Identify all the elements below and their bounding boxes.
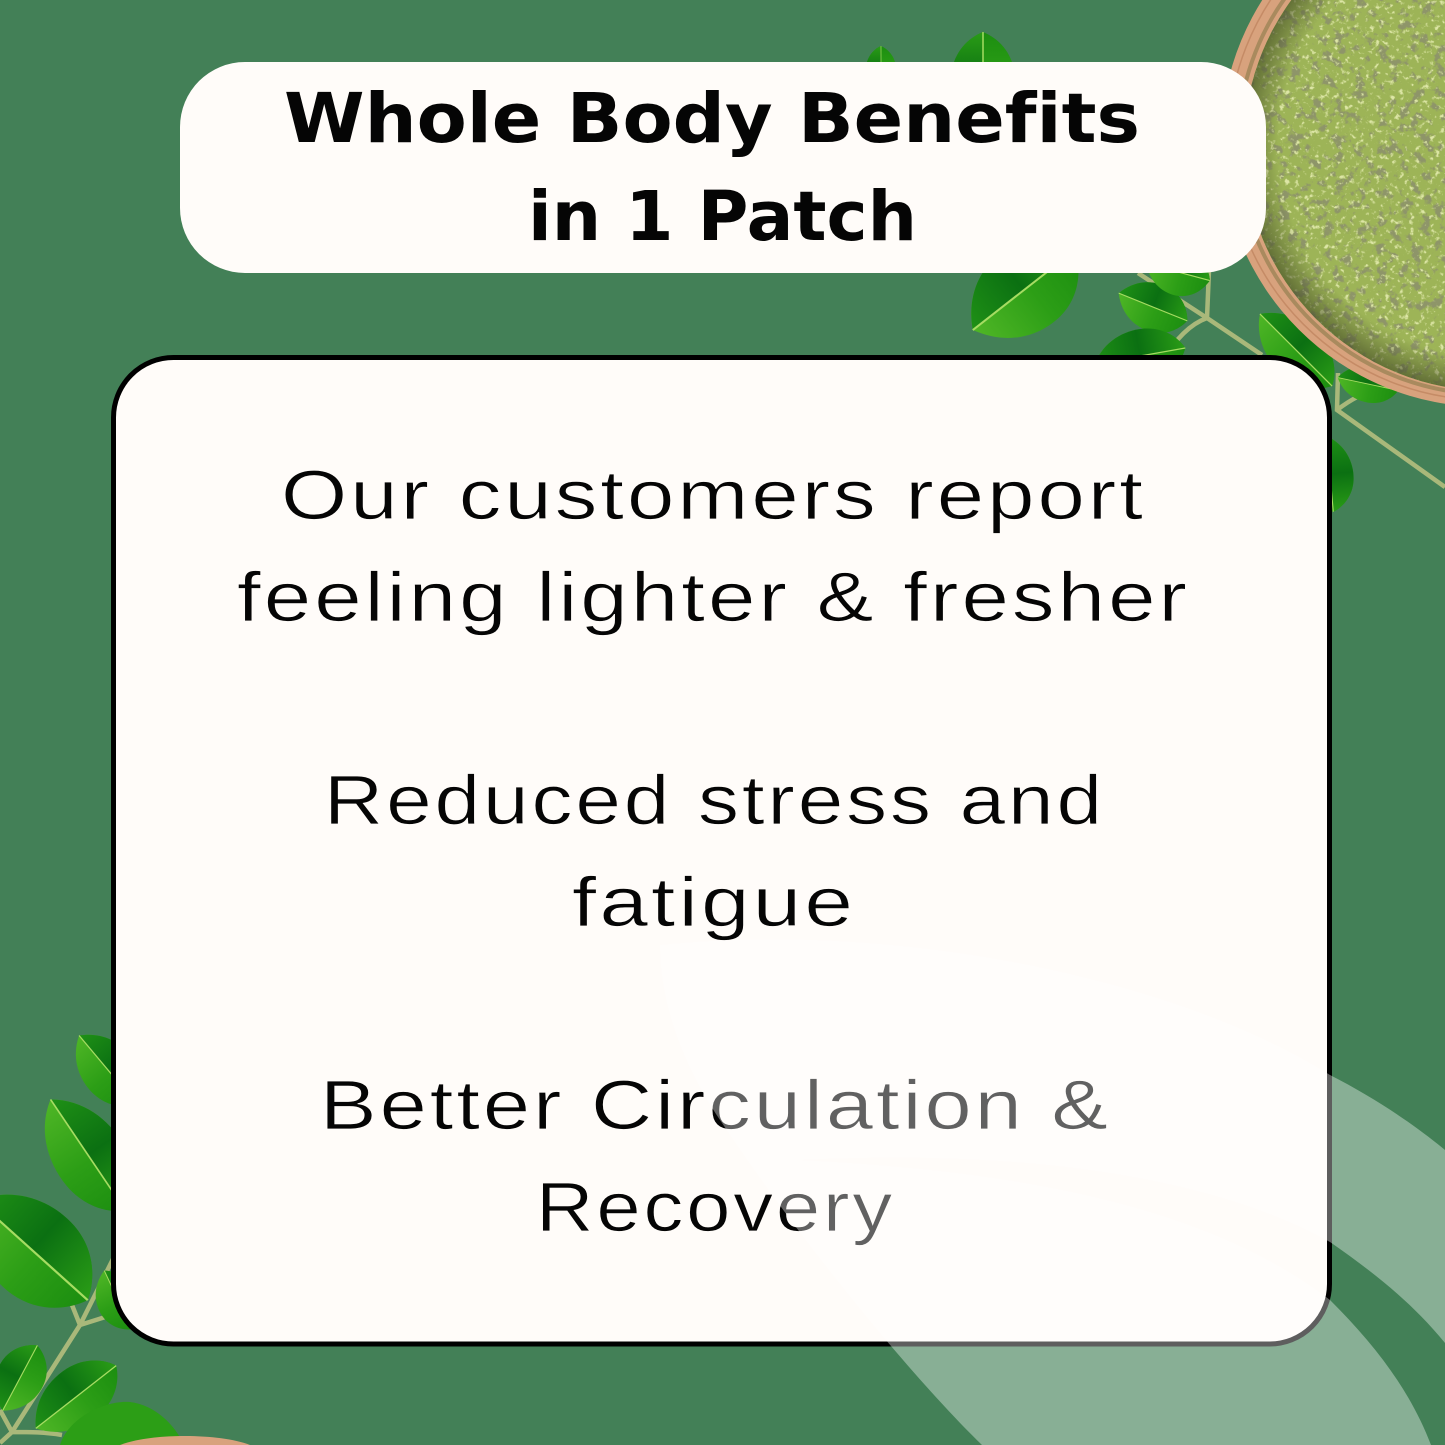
leaf: lower middle bbox=[18, 1343, 134, 1445]
leaf: large under title bbox=[946, 216, 1102, 364]
leaf: small top bbox=[866, 46, 896, 98]
text: reduced stress: Reduced stress and bbox=[324, 761, 1105, 839]
leaf: beside card bbox=[1303, 434, 1357, 514]
leaf: branch upper bbox=[1110, 271, 1196, 343]
bowl rim bbox=[1221, 0, 1445, 407]
bowl edge bottom bbox=[120, 1436, 250, 1445]
bottom-left leaves and stem bbox=[0, 1018, 250, 1445]
title line 1: Whole Body Benefits bbox=[284, 79, 1140, 159]
leaf: top behind title bbox=[951, 32, 1015, 132]
powder texture bbox=[1251, 0, 1445, 387]
text: reduced stress: fatigue bbox=[572, 863, 856, 941]
leaf: under bowl right bbox=[1334, 360, 1402, 408]
main card bbox=[114, 358, 1330, 1344]
stem bbox=[0, 1255, 118, 1443]
text: customers report: Our customers report bbox=[281, 456, 1146, 534]
text: better circulation bbox=[320, 1066, 1111, 1246]
powder bbox=[1244, 0, 1445, 391]
title pill bbox=[180, 62, 1266, 273]
text: reduced stress bbox=[324, 761, 1105, 941]
text: better circulation: Recovery bbox=[536, 1168, 895, 1246]
leaf: branch lower bbox=[1090, 322, 1190, 390]
leaf: under bowl bbox=[1241, 295, 1351, 405]
leaf: bottom bbox=[60, 1402, 184, 1445]
text: customers report: feeling lighter & fresher bbox=[237, 558, 1190, 636]
translucent arc overlay bbox=[660, 939, 1445, 1445]
leaf: behind card bbox=[85, 1261, 151, 1339]
text: better circulation: Better Circulation & bbox=[320, 1066, 1111, 1144]
stem: upper branch bbox=[1138, 270, 1445, 487]
title line 2: in 1 Patch bbox=[528, 177, 917, 257]
text: customers report bbox=[237, 456, 1190, 636]
leaf: behind title right bbox=[1140, 241, 1216, 303]
leaf: second bbox=[21, 1080, 155, 1230]
leaf: lower left bbox=[0, 1334, 59, 1422]
leaf: large left bbox=[0, 1165, 119, 1335]
top-right leaves and stems bbox=[866, 32, 1445, 514]
leaf: top bbox=[59, 1018, 157, 1122]
powder bowl bbox=[1221, 0, 1445, 407]
